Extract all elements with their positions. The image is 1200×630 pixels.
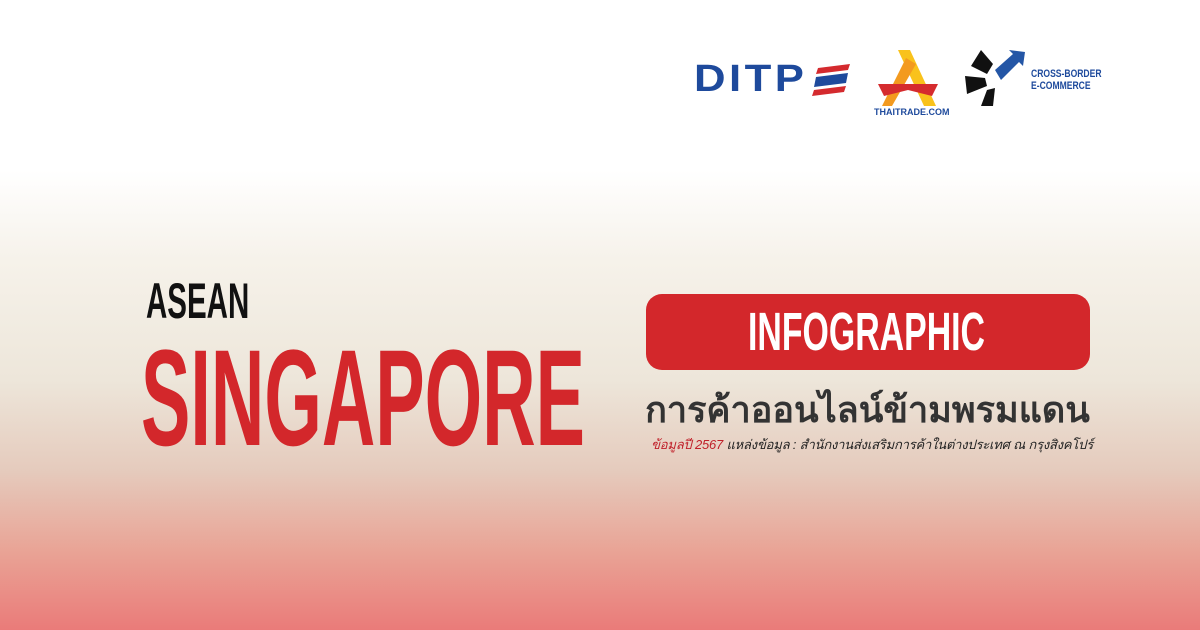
logo: cross-border e-commerce: E-COMMERCE: [1031, 80, 1091, 92]
source line: ข้อมูลปี 2567 แหล่งข้อมูล : สำนักงานส่งเสริมการค้าในต่างประเทศ ณ กรุงสิงคโปร์: [651, 437, 1093, 452]
title: SINGAPORE: SINGAPORE: [141, 322, 585, 475]
logo: DITP: DITP: [694, 58, 807, 100]
red pill: INFOGRAPHIC: [646, 294, 1090, 370]
heading: ASEAN: ASEAN: [146, 273, 249, 329]
logo: THAITRADE: [874, 50, 950, 117]
logo: cross-border e-commerce: [965, 50, 1102, 106]
subtitle Thai: การค้าออนไลน์ข้ามพรมแดน: [645, 389, 1090, 430]
logo: cross-border e-commerce: CROSS-BORDER: [1031, 68, 1102, 80]
logo: THAITRADE: THAITRADE.COM: [874, 107, 950, 117]
red pill: INFOGRAPHIC: INFOGRAPHIC: [748, 302, 985, 362]
